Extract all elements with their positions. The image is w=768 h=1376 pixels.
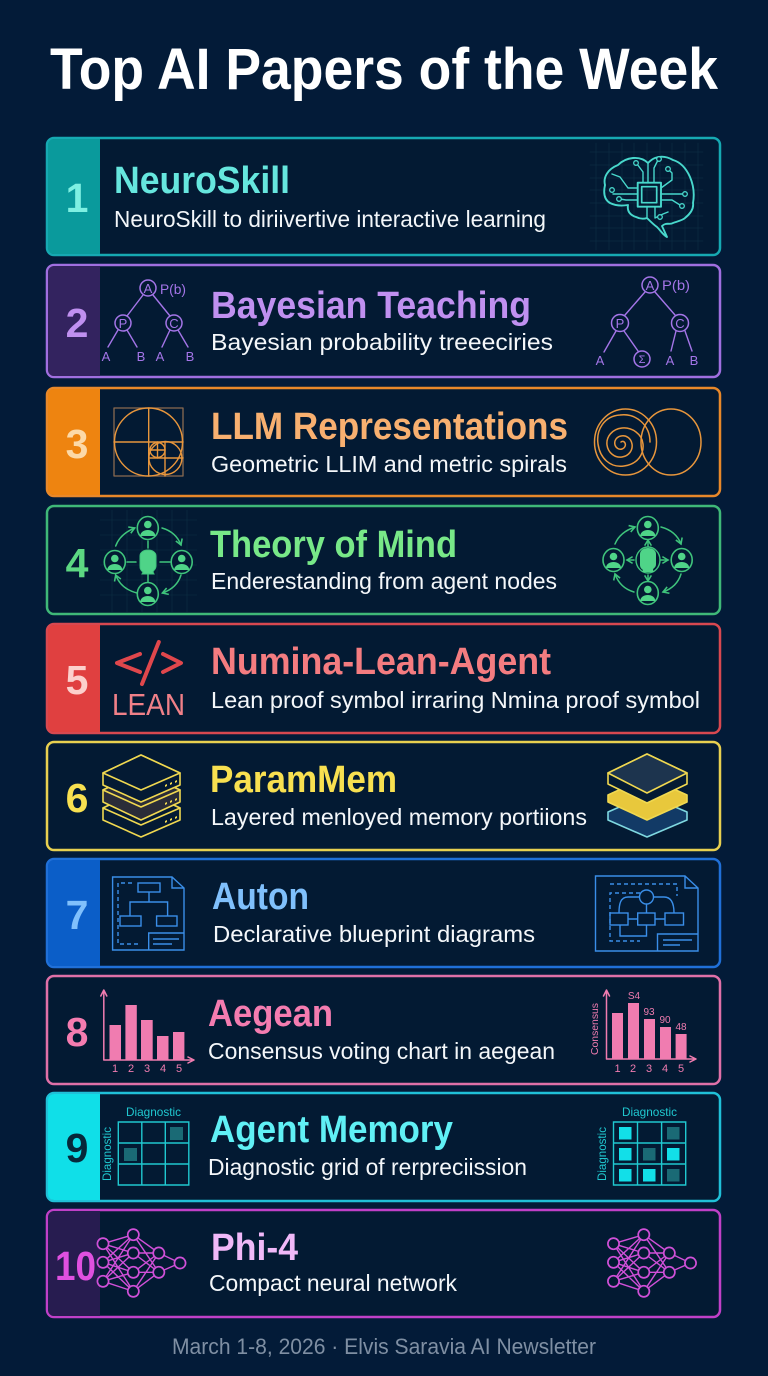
icon: agent nodes left	[100, 510, 197, 612]
description: Diagnostic grid of rerpreciission	[208, 1154, 527, 1180]
heading: ParamMem	[210, 759, 397, 801]
icon: probability tree right: B	[690, 353, 698, 368]
icon: memory layers right	[608, 754, 687, 837]
icon: diagnostic grid left: Diagnostic	[126, 1105, 181, 1119]
heading: Numina-Lean-Agent	[211, 641, 551, 683]
number badge 9	[48, 1094, 100, 1200]
heading: Aegean	[208, 993, 333, 1035]
bar chart right: 48	[675, 1022, 687, 1033]
bar chart left: 3	[144, 1063, 150, 1075]
icon: probability tree left: B	[186, 349, 194, 364]
heading: LLM Representations	[211, 406, 568, 448]
number 5: 5	[66, 657, 88, 703]
bar chart left: 5	[176, 1063, 182, 1075]
number 2: 2	[66, 300, 88, 346]
icon: probability tree left: A	[102, 349, 111, 364]
icon: neural network left	[97, 1229, 186, 1297]
icon: probability tree left: A	[156, 349, 165, 364]
number badge 1	[48, 139, 100, 254]
description: Compact neural network	[209, 1270, 457, 1296]
bar chart left: 4	[160, 1063, 166, 1075]
icon: diagnostic grid left	[100, 1105, 189, 1185]
number 4: 4	[66, 540, 89, 586]
bar chart right: 90	[659, 1015, 671, 1026]
description: NeuroSkill to diriivertive interactive learning	[114, 206, 546, 232]
number badge 10	[48, 1211, 100, 1316]
description: Geometric LLIM and metric spirals	[211, 451, 567, 477]
icon: probability tree left: P	[119, 316, 127, 331]
bar chart right: S4	[628, 991, 641, 1002]
number 1: 1	[66, 175, 88, 221]
heading: Bayesian Teaching	[211, 285, 531, 327]
number 9: 9	[66, 1125, 88, 1171]
number badge 2	[48, 266, 100, 376]
description: Bayesian probability treeeciries	[211, 329, 553, 355]
icon: probability tree left: C	[169, 316, 179, 331]
panel 4: Theory of Mind	[47, 506, 720, 614]
bar chart right: 5	[678, 1063, 684, 1075]
icon: probability tree left: A	[144, 281, 153, 296]
number 3: 3	[66, 421, 88, 467]
icon: probability tree right: Σ	[639, 354, 646, 366]
icon: probability tree right: A	[646, 278, 655, 293]
heading: NeuroSkill	[114, 160, 290, 202]
number 6: 6	[66, 775, 88, 821]
heading: Phi-4	[211, 1227, 298, 1269]
icon: agent nodes right	[603, 516, 692, 604]
icon: circuit brain	[590, 143, 703, 250]
icon: probability tree right	[596, 277, 698, 368]
bar chart left	[101, 990, 194, 1075]
icon: Lean code symbol: LEAN	[112, 687, 185, 722]
description: Declarative blueprint diagrams	[213, 921, 535, 947]
description: Enderestanding from agent nodes	[211, 568, 557, 594]
number 8: 8	[66, 1009, 88, 1055]
icon: memory layers left	[103, 755, 180, 837]
number badge 5	[48, 625, 100, 732]
icon: Lean code symbol	[112, 642, 185, 722]
description: Lean proof symbol irraring Nmina proof symbol	[211, 687, 700, 713]
panel 8: Aegean	[47, 976, 720, 1084]
bar chart left: 2	[128, 1063, 134, 1075]
icon: diagnostic grid right: Diagnostic	[622, 1105, 677, 1119]
description: Consensus voting chart in aegean	[208, 1038, 555, 1064]
bar chart right: 1	[614, 1063, 621, 1075]
bar chart right: 4	[662, 1063, 668, 1075]
icon: probability tree right: P(b)	[662, 277, 690, 293]
icon: overlapping spirals	[594, 409, 701, 475]
panel 5: Numina-Lean-Agent	[47, 624, 720, 733]
heading: Agent Memory	[210, 1109, 453, 1151]
icon: probability tree right: P	[616, 316, 624, 331]
heading: Theory of Mind	[210, 524, 457, 566]
icon: probability tree left	[102, 280, 194, 364]
bar chart right: 2	[630, 1063, 636, 1075]
icon: blueprint left	[113, 877, 184, 950]
bar chart right	[589, 990, 696, 1075]
icon: probability tree right: A	[666, 353, 675, 368]
panel 3: LLM Representations	[47, 388, 720, 496]
panel 7: Auton	[47, 859, 720, 967]
panel 9: Agent Memory	[47, 1093, 720, 1201]
icon: probability tree right: C	[675, 316, 685, 331]
number badge 3	[48, 389, 100, 495]
panel 2: Bayesian Teaching	[47, 265, 720, 377]
heading: Auton	[212, 876, 309, 918]
icon: golden ratio spiral	[114, 408, 183, 476]
description: Layered menloyed memory portiions	[211, 804, 587, 830]
icon: blueprint right	[596, 876, 698, 951]
icon: diagnostic grid right	[595, 1105, 686, 1185]
number 7: 7	[66, 892, 88, 938]
icon: probability tree left: P(b)	[160, 281, 186, 297]
panel 10: Phi-4	[47, 1210, 720, 1317]
icon: probability tree right: A	[596, 353, 605, 368]
icon: probability tree left: B	[137, 349, 145, 364]
icon: neural network right	[608, 1229, 696, 1297]
bar chart right: 93	[643, 1007, 655, 1018]
title: Top AI Papers of the Week	[50, 37, 719, 102]
bar chart right: 3	[646, 1063, 652, 1075]
number 10: 10	[55, 1243, 96, 1289]
footer: March 1-8, 2026 · Elvis Saravia AI Newsletter	[172, 1334, 596, 1359]
bar chart left: 1	[112, 1063, 118, 1075]
panel 6: ParamMem	[47, 742, 720, 850]
icon: diagnostic grid right: Diagnostic	[595, 1127, 609, 1181]
bar chart right: Consensus	[589, 1003, 601, 1055]
number badge 7	[48, 860, 100, 966]
panel 1: NeuroSkill	[47, 138, 720, 255]
icon: diagnostic grid left: Diagnostic	[100, 1127, 114, 1181]
